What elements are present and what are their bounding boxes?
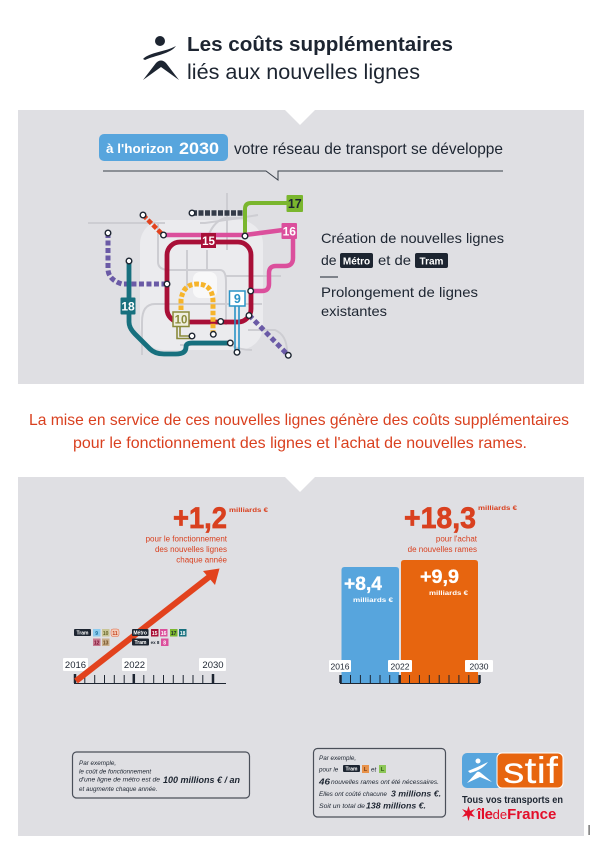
bar: 2016-2022: milliards € xyxy=(353,597,393,604)
horizon pill xyxy=(99,134,228,161)
line badges: 11 xyxy=(112,631,118,637)
callout: rolling stock example: Soit un total de xyxy=(319,803,366,810)
figure +1,2: +1,2 xyxy=(173,502,227,535)
figure +18,3: +18,3 xyxy=(404,502,476,535)
axis xyxy=(63,658,226,684)
line 10 xyxy=(177,327,192,338)
callout: operating example: Par exemple, xyxy=(79,760,116,767)
line badges: Métro xyxy=(133,630,147,636)
legend text xyxy=(320,230,504,319)
panel: costs xyxy=(18,477,584,836)
bar: 2016-2022: +8,4 xyxy=(344,574,382,595)
figure +1,2: milliards € xyxy=(229,507,268,514)
line: dark dashed xyxy=(192,210,245,216)
axis: 2022 xyxy=(124,660,145,671)
badge 9 xyxy=(230,291,245,306)
callout: rolling stock example: et xyxy=(371,766,377,774)
bar: 2016-2022 xyxy=(342,567,399,683)
logo: STIF xyxy=(462,750,563,823)
bar: 2022-2030: milliards € xyxy=(429,590,468,597)
statement text: La mise en service de ces nouvelles lignes génère des coûts supplémentaires xyxy=(29,412,569,429)
legend text: existantes xyxy=(321,303,387,319)
badge 18: 18 xyxy=(121,300,135,314)
line 17 xyxy=(245,203,288,236)
callout: rolling stock example: 46 xyxy=(318,776,330,786)
badge 10: 10 xyxy=(175,314,187,326)
logo: STIF: stif xyxy=(503,750,559,791)
legend text: de xyxy=(321,252,337,268)
callout: operating example: le coût de fonctionnement xyxy=(79,768,151,776)
statement text: pour le fonctionnement des lignes et l'achat de nouvelles rames. xyxy=(73,435,527,452)
axis xyxy=(329,660,493,684)
callout line xyxy=(103,171,503,180)
callout: rolling stock example: Par exemple, xyxy=(319,755,356,762)
callout: rolling stock example: 3 millions €. xyxy=(391,788,441,798)
line 9 xyxy=(235,305,239,352)
figure +18,3: pour l'achat xyxy=(436,534,478,544)
bar: 2022-2030: +9,9 xyxy=(420,567,459,588)
tag: Tram xyxy=(415,253,448,268)
callout: rolling stock example xyxy=(314,748,446,817)
tag: Métro: Métro xyxy=(343,256,370,268)
line badges: Tram xyxy=(77,630,89,636)
line badges: 9 xyxy=(95,631,98,637)
figure +1,2: des nouvelles lignes xyxy=(155,545,227,554)
callout: rolling stock example: L xyxy=(381,767,385,773)
horizon pill: 2030 xyxy=(179,139,219,158)
line: red dashed xyxy=(143,215,163,235)
badge 15 xyxy=(201,233,216,248)
panel: network development xyxy=(18,110,584,384)
legend text: et de xyxy=(378,252,411,268)
badge 10 xyxy=(173,312,189,326)
logo: STIF: Tous vos transports en xyxy=(462,795,563,806)
figure +18,3: milliards € xyxy=(478,505,517,512)
callout: rolling stock example: 138 millions €. xyxy=(366,800,426,810)
stations xyxy=(105,210,291,358)
badge 17: 17 xyxy=(288,197,302,211)
network map xyxy=(88,193,303,358)
icon: running figure xyxy=(143,36,179,80)
badge 16: 16 xyxy=(283,224,296,238)
callout: operating example xyxy=(72,752,250,798)
line: yellow dashed xyxy=(181,284,213,334)
callout: rolling stock example: pour le xyxy=(318,766,339,774)
heading: Les coûts supplémentaires xyxy=(187,34,453,56)
bar: 2022-2030 xyxy=(401,560,478,683)
page mark xyxy=(588,825,590,835)
line badges xyxy=(74,629,186,646)
line badges: 16 xyxy=(161,631,167,637)
callout: rolling stock example: Elles ont coûté chacune xyxy=(319,791,387,798)
line: purple dashed xyxy=(108,233,167,284)
figure +18,3: de nouvelles rames xyxy=(408,545,477,554)
line badges: 8 xyxy=(163,640,166,646)
line 16 xyxy=(164,230,293,291)
chart: operating costs xyxy=(63,502,268,684)
heading xyxy=(187,34,453,84)
heading: liés aux nouvelles lignes xyxy=(187,61,420,84)
axis: 2030 xyxy=(470,662,489,672)
axis: 2022 xyxy=(391,662,410,672)
title block xyxy=(143,34,453,84)
line badges: 10 xyxy=(103,631,109,637)
wordmark: Île-de-France: îledeFrance xyxy=(476,806,556,823)
line badges: 12 xyxy=(94,640,100,646)
line badges: 18 xyxy=(180,631,186,637)
figure +1,2 xyxy=(146,502,268,564)
chart: rolling stock purchase xyxy=(329,502,517,684)
badge 17 xyxy=(286,195,303,212)
icon: red star xyxy=(462,806,475,821)
axis: 2030 xyxy=(202,660,224,671)
line badges: Tram xyxy=(135,640,147,646)
callout: rolling stock example: L xyxy=(364,767,368,773)
badge 15: 15 xyxy=(202,236,215,248)
statement text xyxy=(29,412,569,452)
figure +1,2: pour le fonctionnement xyxy=(146,534,228,544)
subheading: votre réseau de transport se développe xyxy=(234,141,503,158)
callout: rolling stock example: nouvelles rames ont été nécessaires. xyxy=(331,779,439,786)
line 18 xyxy=(129,261,231,354)
legend text: Prolongement de lignes xyxy=(321,284,478,300)
legend text: Création de nouvelles lignes xyxy=(321,230,504,246)
line badges: ex 8 xyxy=(151,640,160,645)
axis: 2016 xyxy=(331,662,350,672)
axis: 2016 xyxy=(65,660,86,671)
figure +1,2: chaque année xyxy=(176,556,228,564)
line 15 ring xyxy=(167,242,251,322)
figure +18,3 xyxy=(404,502,517,554)
tag: Métro xyxy=(340,253,373,268)
callout: operating example: 100 millions € / an xyxy=(163,775,240,785)
arrow xyxy=(76,568,220,681)
line badges: 13 xyxy=(103,640,109,646)
tag: Tram: Tram xyxy=(420,256,444,268)
callout: rolling stock example: Tram xyxy=(346,766,358,772)
badge 9: 9 xyxy=(234,292,241,306)
line badges: 17 xyxy=(171,631,177,637)
horizon pill: à l'horizon xyxy=(106,141,173,156)
callout: operating example: et augmente chaque année. xyxy=(79,786,157,793)
line badges: 15 xyxy=(152,631,158,637)
icon: logo figure xyxy=(467,758,492,783)
callout: operating example: d'une ligne de métro est de xyxy=(79,776,161,784)
